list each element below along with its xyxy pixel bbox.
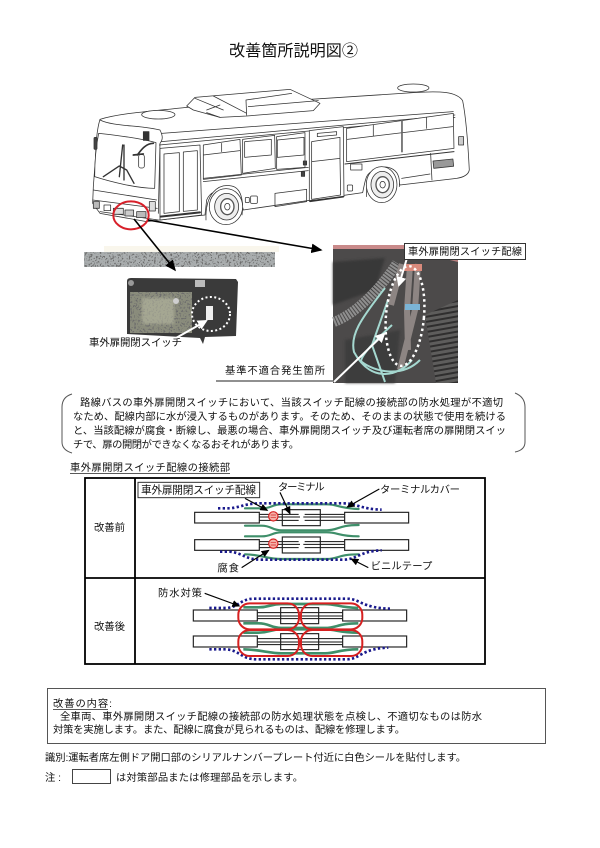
description text block [62,393,525,453]
label: vinyl tape: ビニルテープ [371,561,433,573]
blue vinyl tape dotted [218,503,382,560]
white pointers [399,258,407,285]
diagram: after improvement [158,587,407,659]
corrugated tube [334,263,397,322]
bus body [93,92,469,222]
description text block: 路線バスの車外扉開閉スイッチにおいて、当該スイッチ配線の接続部の防水処理が不適切 [80,396,503,409]
front door [160,145,202,220]
roof line [159,112,455,145]
section heading: 車外扉開閉スイッチ配線の接続部 [70,461,230,474]
blue vinyl tape dotted [209,599,390,659]
photo: wiring [333,245,458,383]
photo: bus underside strip [84,246,279,267]
front cap [100,120,162,213]
arrow: to switch photo [134,219,175,270]
wipers [103,145,134,183]
red corrosion marks [269,512,278,548]
green terminal cover [243,604,358,653]
label: corrosion: 腐食 [217,563,239,575]
connectors [391,264,418,370]
description text block: と、当該配線が腐食・断線し、最悪の場合、車外扉開閉スイッチ及び運転者席の扉開閉スイッ [73,424,506,437]
connector blocks [193,608,407,650]
box: improvement details: 全車両、車外扉開閉スイッチ配線の接続部の防水処理状態を点検し、不適切なものは防水 [60,710,482,723]
brackets [62,393,525,453]
roof air conditioner [187,89,320,117]
box: improvement details [48,688,546,744]
front wheel [206,186,243,220]
dotted circle [192,297,230,331]
label: terminal: ターミナル [278,481,325,493]
white pointer [176,321,206,338]
label: nonconforming location [216,364,333,381]
arrow: to wiring photo [148,220,321,250]
windshield [95,133,156,188]
wires [257,613,343,645]
note [45,770,303,784]
label box: wiring: 車外扉開閉スイッチ配線 [141,484,256,497]
row label: after: 改善後 [94,620,126,633]
row label: before: 改善前 [94,521,125,534]
label box: wiring [404,244,526,260]
destination sign and mirror [143,132,149,140]
roof vents [142,110,175,119]
title: 改善箇所説明図② [229,42,358,60]
red circle highlight [113,201,149,229]
note: は対策部品または修理部品を示します。 [116,771,303,784]
identification note: 識別:運転者席左側ドア開口部のシリアルナンバープレート付近に白色シールを貼付します。 [45,751,466,764]
green terminal cover [245,504,359,559]
label: terminal cover: ターミナルカバー [380,484,460,496]
label: switch: 車外扉開閉スイッチ [89,336,182,349]
box: improvement details: 対策を実施します。また、配線に腐食が見られるものは、配線を修理します。 [53,723,405,736]
dotted oval [382,265,428,367]
front lower [93,190,158,220]
illustration: bus [93,84,469,229]
description text block: なため、配線内部に水が浸入するものがあります。そのため、そのままの状態で使用を続ける [73,410,506,423]
front windows [203,139,241,179]
label box: wiring: 車外扉開閉スイッチ配線 [408,245,522,258]
rear windows [347,113,454,162]
label: waterproofing: 防水対策 [158,587,202,600]
leader arrows [242,489,379,568]
side details [433,159,454,168]
label: nonconforming location: 基準不適合発生箇所 [225,364,325,377]
box: improvement details: 改善の内容: [53,697,112,710]
green wires [353,288,420,382]
connector blocks [195,510,409,553]
description text block: チで、扉の開閉ができなくなるおそれがあります。 [73,438,299,451]
table frame [85,478,485,664]
red waterproofing outlines [238,603,362,656]
diagram: before improvement [138,481,460,575]
photo: door open switch [127,278,238,344]
rear wheel [366,167,399,197]
leader arrow [205,593,239,606]
rear door [309,127,344,201]
wires [259,514,345,548]
note: 注: [45,771,61,784]
